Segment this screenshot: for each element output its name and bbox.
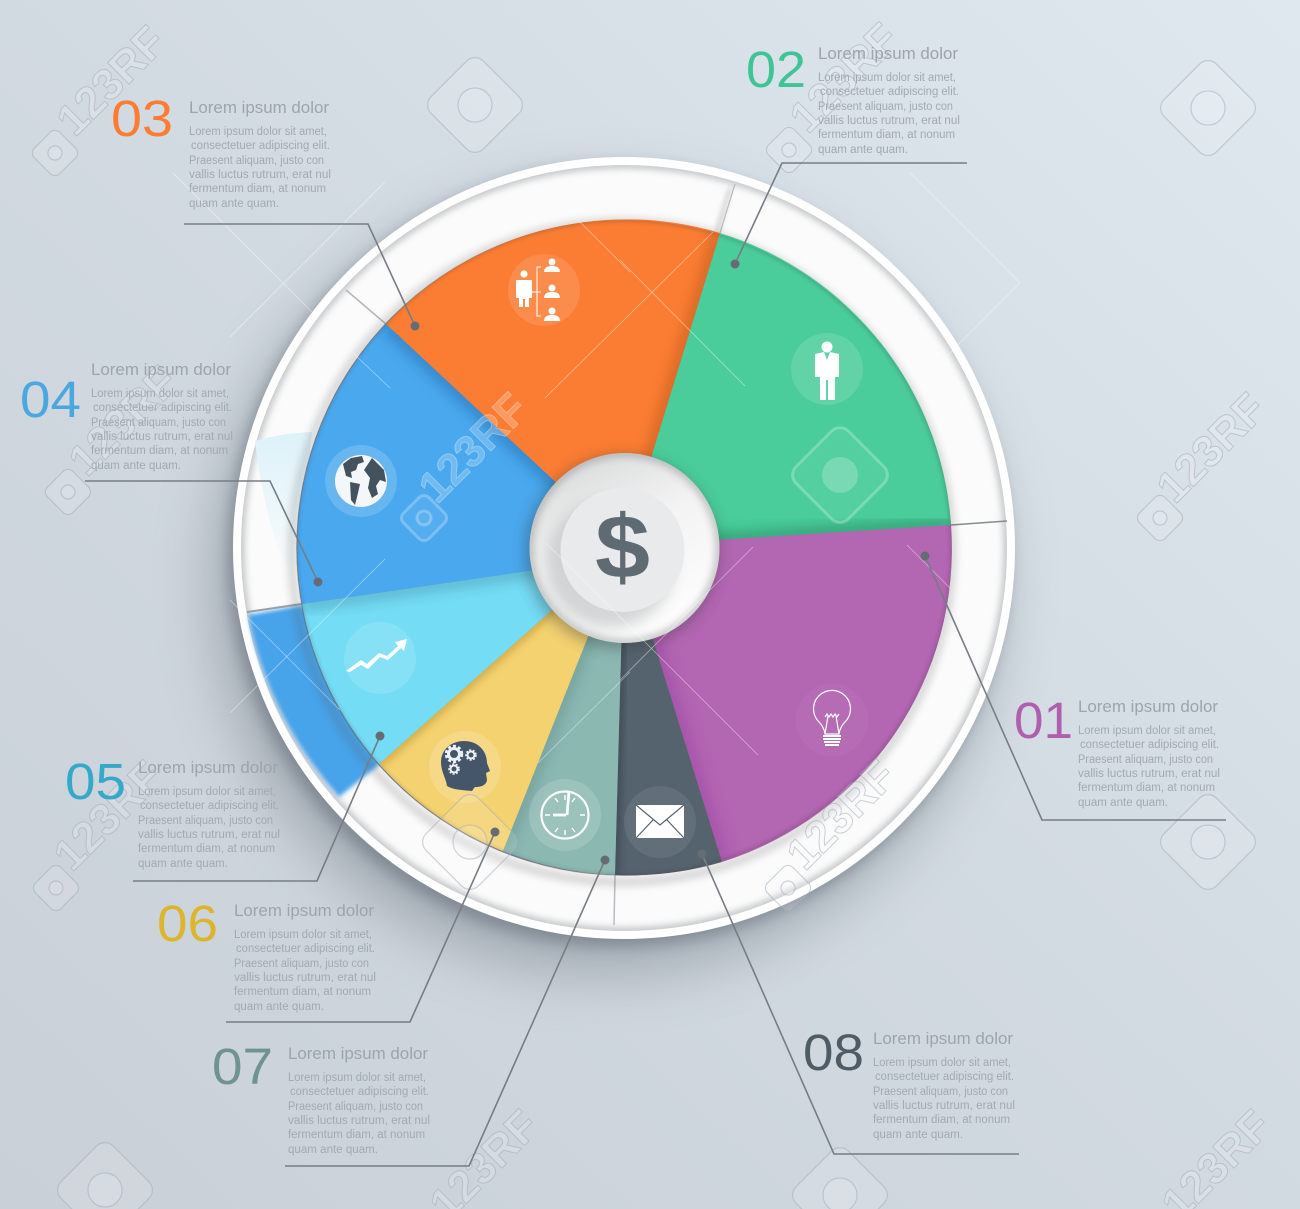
callout 08: 08: [803, 1024, 864, 1081]
callout 04: 04: [20, 371, 81, 428]
slice 08: dark slate: [615, 638, 722, 876]
callout 05: fermentum diam, at nonum: [138, 843, 275, 855]
watermark stamps: 123RF: [409, 384, 537, 512]
ring fold lines: [247, 184, 1007, 925]
watermark stamps: 123RF: [780, 14, 908, 142]
callout 08: vallis luctus rutrum, erat nul: [873, 1100, 1015, 1112]
callout 01: [920, 552, 1226, 820]
watermark stamps: 123RF: [1147, 384, 1275, 512]
slice 06: yellow: [379, 610, 588, 851]
icon: clock: [529, 779, 601, 851]
callout 08: Lorem ipsum dolor sit amet,: [873, 1057, 1011, 1069]
pie rim inner shadow: [295, 219, 953, 877]
callout 02: consectetuer adipiscing elit.: [820, 86, 959, 98]
slice 02: green: [651, 233, 951, 540]
icon: head with gears: [429, 731, 501, 803]
callout 02: Praesent aliquam, justo con: [818, 101, 953, 113]
callout 07: Lorem ipsum dolor sit amet,: [288, 1072, 426, 1084]
callout 06: consectetuer adipiscing elit.: [236, 943, 375, 955]
icon: globe: [325, 445, 397, 517]
dollar sign: $: [595, 498, 650, 598]
callout 08: [698, 850, 1019, 1154]
watermark stamps: 123RF: [59, 357, 187, 485]
slice 07: teal: [503, 636, 622, 875]
callout 08: consectetuer adipiscing elit.: [875, 1071, 1014, 1083]
callout 08: fermentum diam, at nonum: [873, 1114, 1010, 1126]
watermark stamps: 123RF: [44, 752, 172, 880]
callout 06: Praesent aliquam, justo con: [234, 958, 369, 970]
callout 06: vallis luctus rutrum, erat nul: [234, 972, 376, 984]
callout 03: Praesent aliquam, justo con: [189, 155, 324, 167]
slice 04: blue: [297, 324, 556, 604]
callout 06: fermentum diam, at nonum: [234, 986, 371, 998]
callout 05: Lorem ipsum dolor sit amet,: [138, 786, 276, 798]
callout 02: 02: [746, 41, 806, 98]
callout 01: Lorem ipsum dolor sit amet,: [1078, 725, 1216, 737]
callout 03: consectetuer adipiscing elit.: [191, 140, 330, 152]
callout 02: vallis luctus rutrum, erat nul: [818, 115, 960, 127]
callout 05: consectetuer adipiscing elit.: [140, 800, 279, 812]
slice 01: purple: [653, 525, 952, 862]
callout 03: 03: [111, 90, 173, 147]
callout 04: Lorem ipsum dolor: [91, 360, 231, 379]
callout 05: [65, 732, 384, 881]
callout 04: Praesent aliquam, justo con: [91, 417, 226, 429]
pie shadow on ring: [292, 222, 952, 882]
callout 02: Lorem ipsum dolor: [818, 44, 958, 63]
callout 03: vallis luctus rutrum, erat nul: [189, 169, 331, 181]
icon: light bulb: [796, 684, 868, 756]
icon: person: [791, 333, 863, 405]
callout 07: quam ante quam.: [288, 1144, 378, 1156]
callout 04: [20, 360, 322, 586]
ring accent: pale cyan area: [255, 432, 312, 565]
callout 06: Lorem ipsum dolor sit amet,: [234, 929, 372, 941]
callout 02: fermentum diam, at nonum: [818, 129, 955, 141]
callout 05: vallis luctus rutrum, erat nul: [138, 829, 280, 841]
callout 01: 01: [1014, 692, 1073, 749]
callout 05: quam ante quam.: [138, 858, 228, 870]
icon: rising arrow: [344, 622, 416, 694]
hub inner disk: [560, 488, 684, 612]
callout 07: 07: [212, 1038, 273, 1095]
callout 02: Lorem ipsum dolor sit amet,: [818, 72, 956, 84]
watermark stamps: 123RF: [777, 751, 905, 879]
pie chart: [295, 215, 960, 880]
circle drop shadow: [214, 165, 1009, 972]
callout 07: fermentum diam, at nonum: [288, 1129, 425, 1141]
callout 01: fermentum diam, at nonum: [1078, 782, 1215, 794]
callout 01: Lorem ipsum dolor: [1078, 697, 1218, 716]
callout 01: quam ante quam.: [1078, 797, 1168, 809]
callout 03: Lorem ipsum dolor: [189, 98, 329, 117]
callout 04: vallis luctus rutrum, erat nul: [91, 431, 233, 443]
callout 08: Praesent aliquam, justo con: [873, 1086, 1008, 1098]
callout 03: fermentum diam, at nonum: [189, 183, 326, 195]
callout 04: Lorem ipsum dolor sit amet,: [91, 388, 229, 400]
callout 08: Lorem ipsum dolor: [873, 1029, 1013, 1048]
slice 03: orange: [386, 219, 720, 482]
callout 08: quam ante quam.: [873, 1129, 963, 1141]
watermark stamps: 123RF: [47, 17, 175, 145]
callout 02: [730, 41, 967, 268]
callout 06: 06: [157, 895, 218, 952]
center hub: [525, 453, 720, 649]
callout 06: Lorem ipsum dolor: [234, 901, 374, 920]
slice 05: cyan: [302, 570, 552, 764]
callout 04: fermentum diam, at nonum: [91, 445, 228, 457]
icon: organisation chart: [508, 254, 580, 326]
callout 07: consectetuer adipiscing elit.: [290, 1086, 429, 1098]
callout 07: vallis luctus rutrum, erat nul: [288, 1115, 430, 1127]
icon: envelope: [624, 786, 696, 858]
callout 01: Praesent aliquam, justo con: [1078, 754, 1213, 766]
callout 05: 05: [65, 753, 126, 810]
callout 03: [111, 90, 420, 330]
callout 04: consectetuer adipiscing elit.: [93, 402, 232, 414]
callout 06: [157, 828, 500, 1022]
callout 06: quam ante quam.: [234, 1001, 324, 1013]
callout 03: quam ante quam.: [189, 198, 279, 210]
callout 05: Lorem ipsum dolor: [138, 758, 278, 777]
callout 03: Lorem ipsum dolor sit amet,: [189, 126, 327, 138]
callout 04: quam ante quam.: [91, 460, 181, 472]
callout 02: quam ante quam.: [818, 144, 908, 156]
outer white ring and inner band: [233, 157, 1015, 939]
callout 07: Praesent aliquam, justo con: [288, 1101, 423, 1113]
callout 07: Lorem ipsum dolor: [288, 1044, 428, 1063]
callout 07: [212, 856, 610, 1166]
ring accent: blue band: [248, 605, 380, 797]
callout 01: vallis luctus rutrum, erat nul: [1078, 768, 1220, 780]
callout 01: consectetuer adipiscing elit.: [1080, 739, 1219, 751]
callout 05: Praesent aliquam, justo con: [138, 815, 273, 827]
